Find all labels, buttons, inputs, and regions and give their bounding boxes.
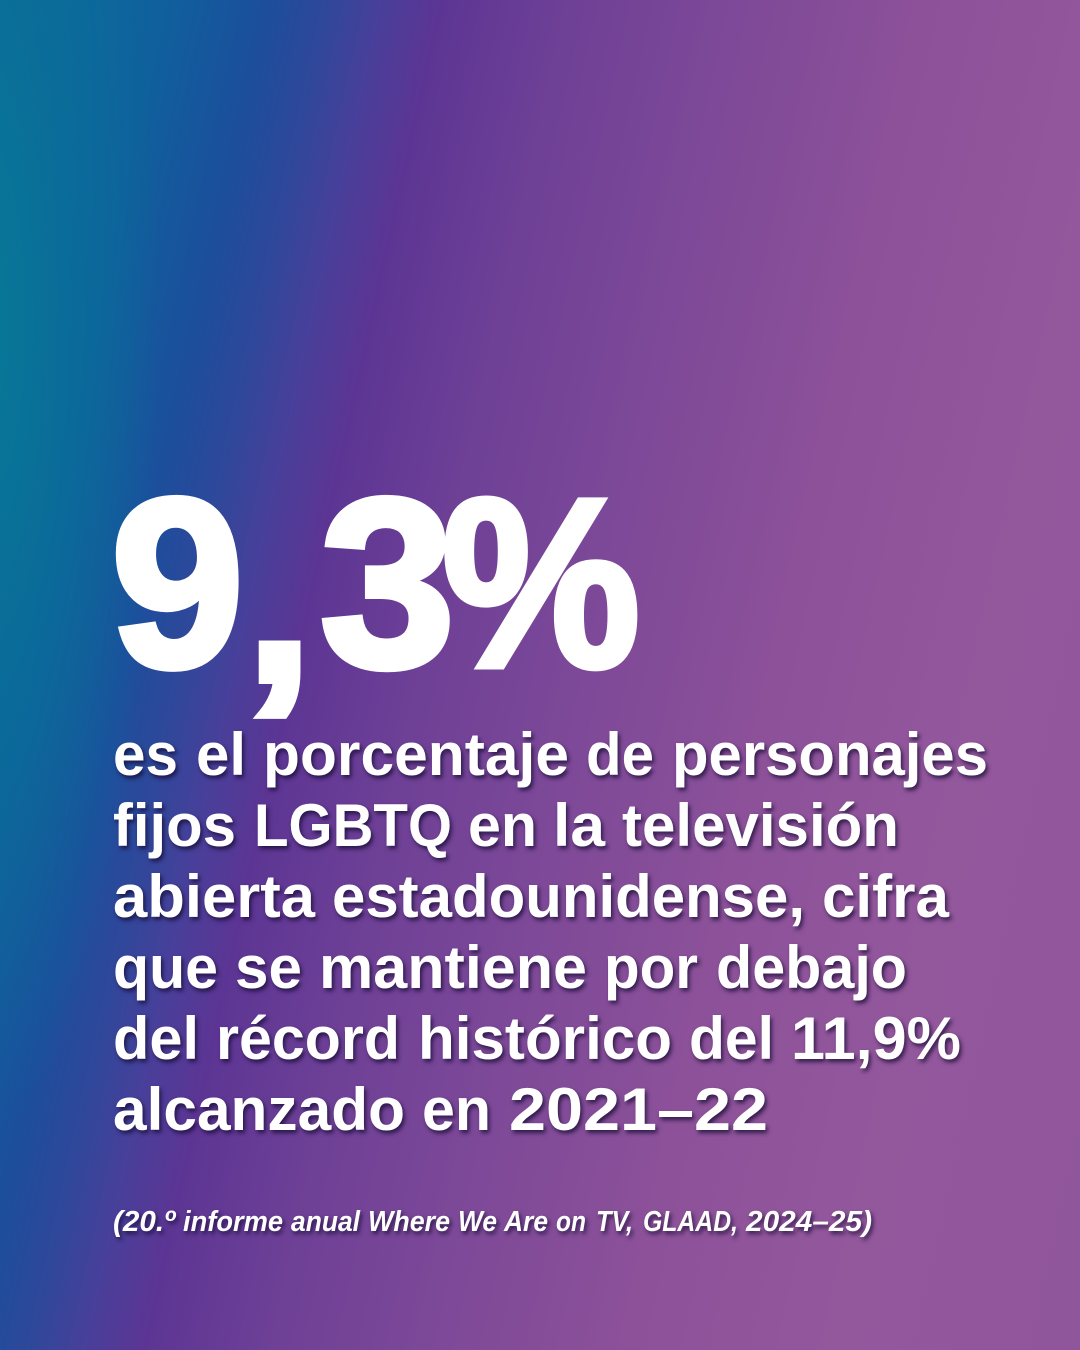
- main statement: en: [468, 792, 537, 859]
- source note: [113, 1206, 872, 1238]
- main statement: estadounidense,: [332, 863, 805, 930]
- main statement: personajes: [672, 721, 988, 788]
- main statement: porcentaje: [263, 721, 569, 788]
- main statement: [113, 721, 988, 1143]
- big statistic: ,: [248, 475, 311, 727]
- main statement: por: [604, 934, 698, 1001]
- big statistic: %: [442, 449, 640, 717]
- main statement: se: [235, 934, 302, 1001]
- main statement: récord: [216, 1005, 400, 1072]
- source note: on: [556, 1206, 586, 1238]
- main statement: abierta: [113, 863, 316, 930]
- main statement: televisión: [622, 792, 899, 859]
- source note: Where: [368, 1206, 450, 1238]
- main statement: 11,9%: [791, 1005, 961, 1072]
- source note: (20.º: [113, 1206, 176, 1238]
- source note: Are: [503, 1206, 548, 1238]
- big statistic: 9: [111, 449, 244, 717]
- source note: anual: [291, 1206, 361, 1238]
- source note: GLAAD,: [643, 1206, 738, 1238]
- source note: We: [458, 1206, 497, 1238]
- main statement: mantiene: [319, 934, 587, 1001]
- main statement: el: [196, 721, 246, 788]
- main statement: cifra: [822, 863, 950, 930]
- source note: TV,: [596, 1206, 633, 1238]
- main statement: que: [113, 934, 218, 1001]
- main statement: en: [422, 1076, 491, 1143]
- main statement: fijos: [113, 792, 236, 859]
- main statement: del: [689, 1005, 774, 1072]
- main statement: la: [553, 792, 606, 859]
- main statement: LGBTQ: [254, 792, 452, 859]
- main statement: 2021–22: [509, 1076, 768, 1143]
- big statistic: 3: [320, 449, 455, 717]
- main statement: es: [113, 721, 178, 788]
- main statement: alcanzado: [113, 1076, 405, 1143]
- main statement: histórico: [418, 1005, 672, 1072]
- main statement: del: [113, 1005, 199, 1072]
- source note: informe: [183, 1206, 283, 1238]
- big statistic: [111, 449, 640, 727]
- source note: 2024–25): [745, 1206, 872, 1238]
- main statement: de: [586, 721, 654, 788]
- main statement: debajo: [716, 934, 907, 1001]
